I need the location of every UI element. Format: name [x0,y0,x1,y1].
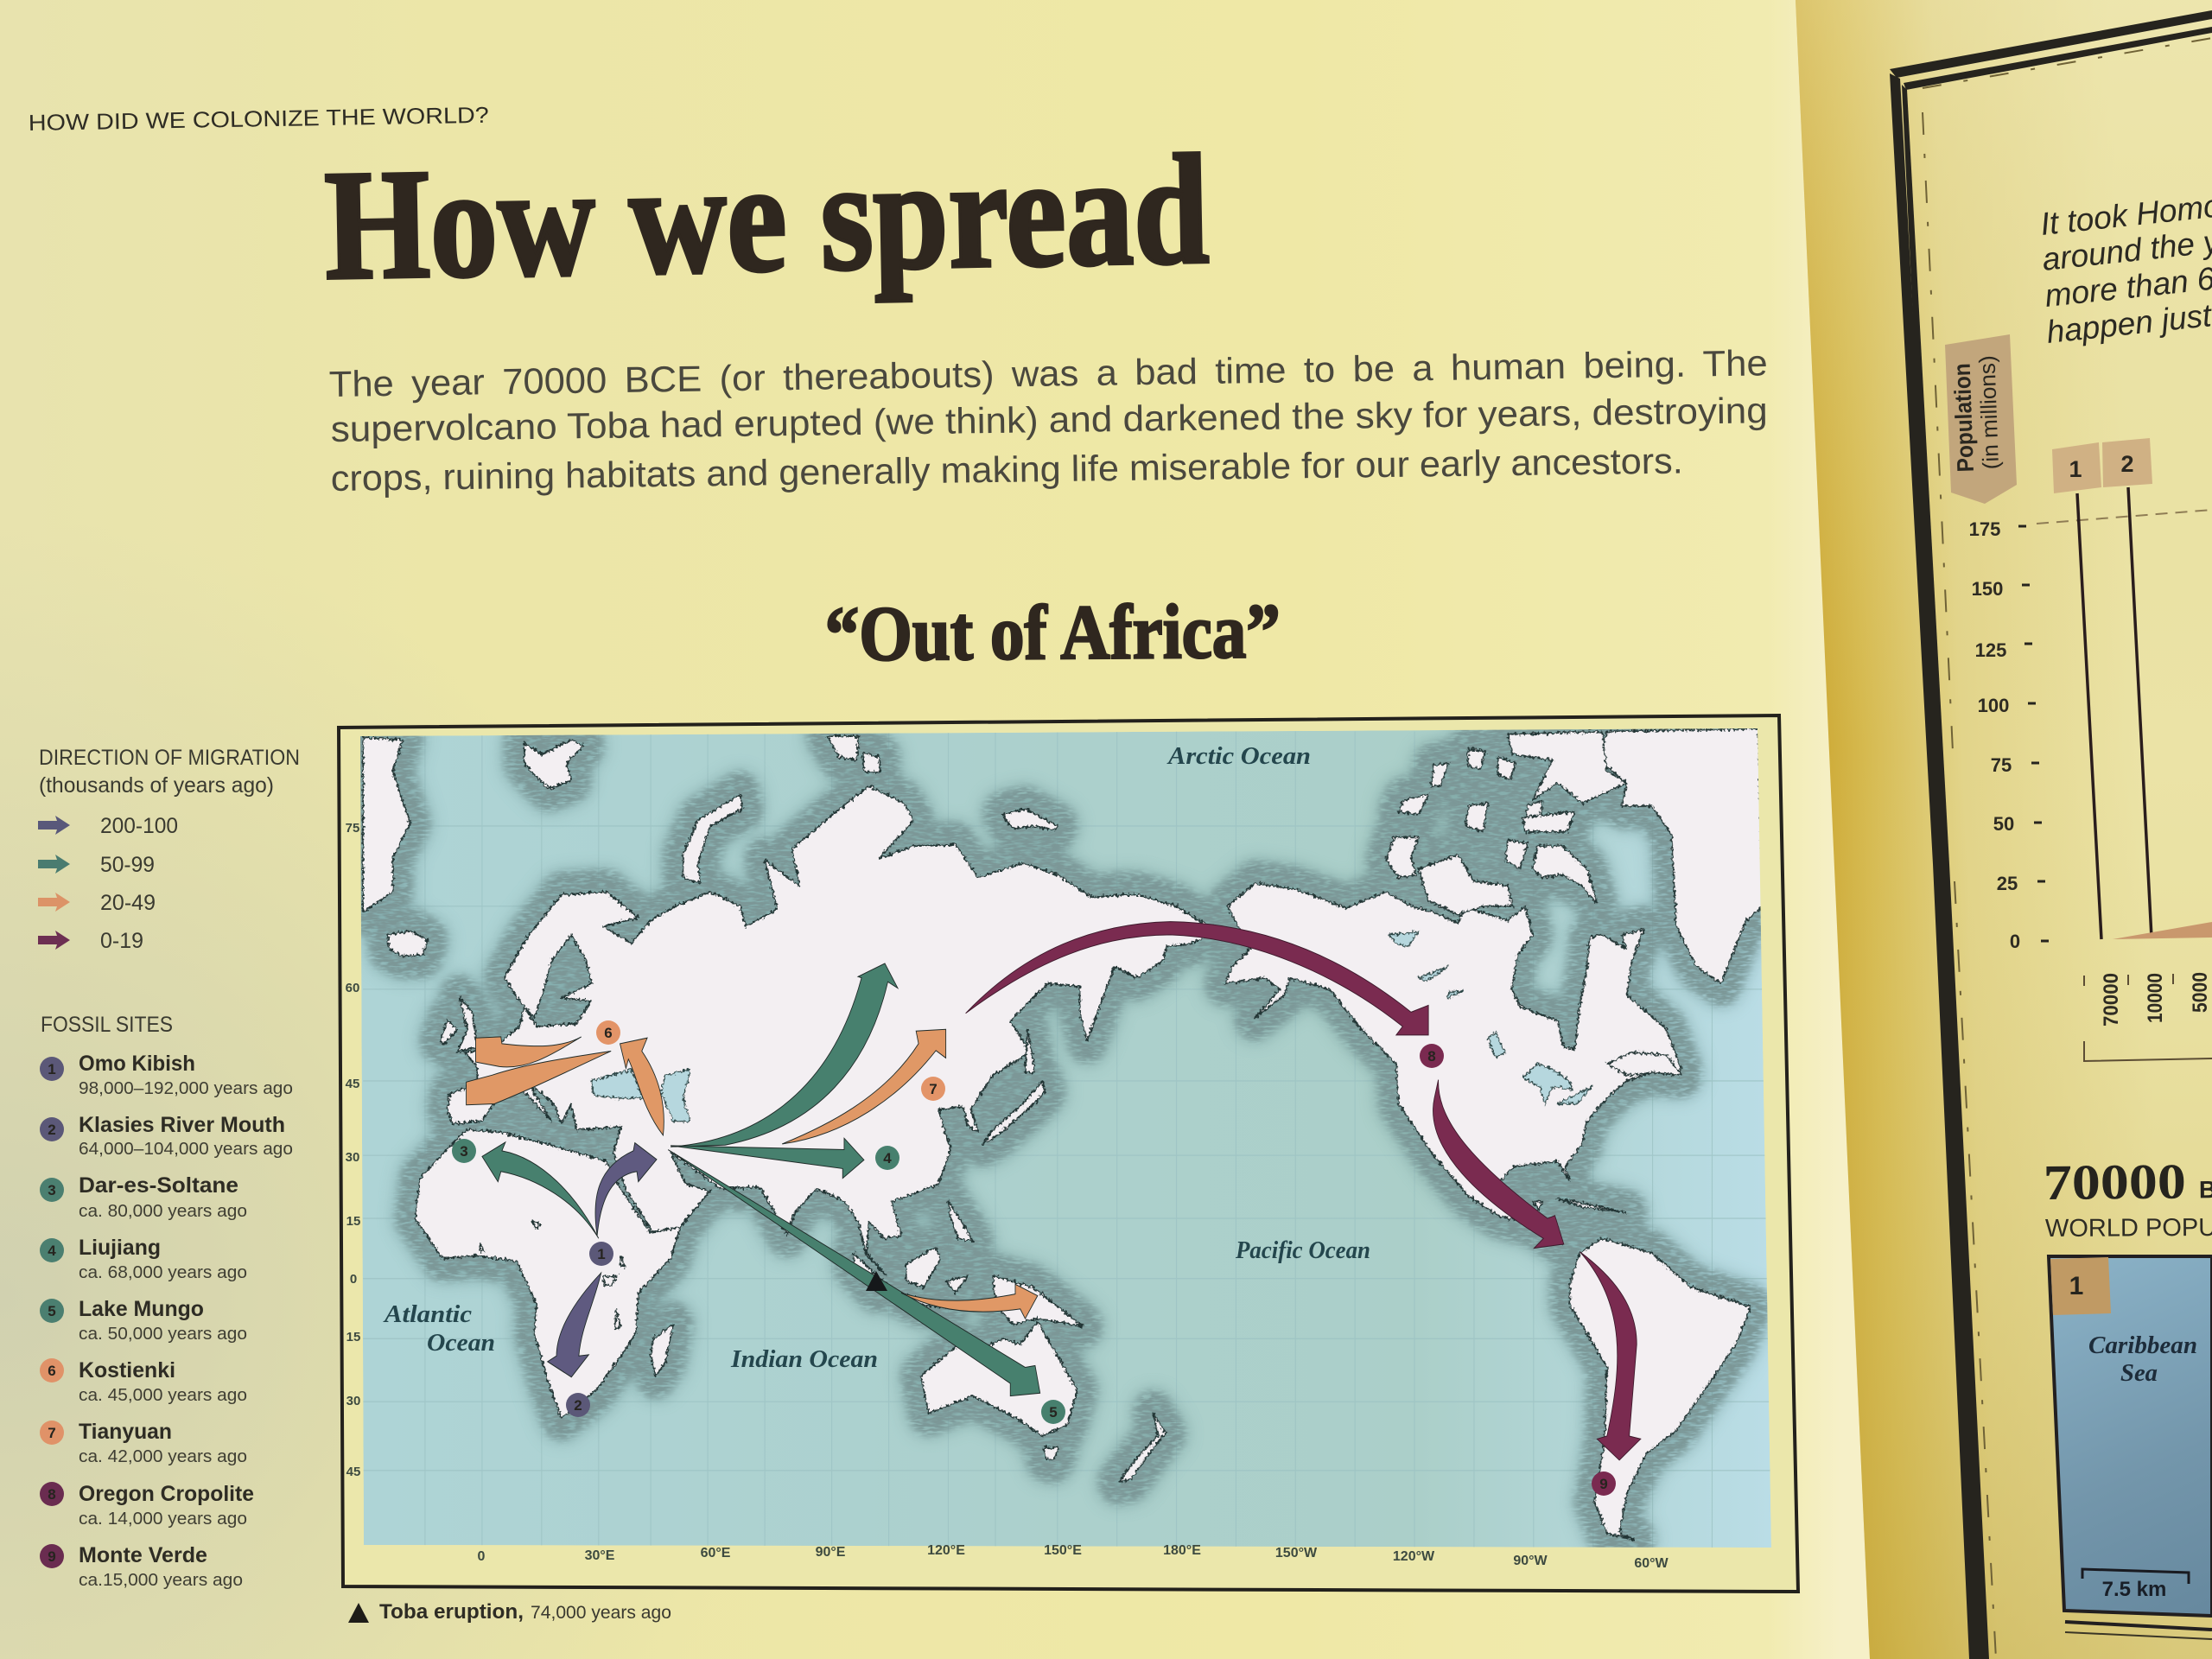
site 7 [40,1420,247,1466]
site 7: 7 [48,1425,56,1441]
timeline box 2: 2 [2120,451,2134,477]
year heading: 70000 [2044,1154,2186,1211]
Toba eruption note [348,1600,671,1624]
arrow: orange to Tianyuan [782,1029,946,1144]
longitude labels: 90°E [816,1545,846,1560]
latitude labels: 30 [346,1150,359,1165]
site markers on map: 8 [1427,1048,1436,1065]
y axis labels [1969,518,2049,952]
latitude labels: 60 [346,981,359,995]
site 3: ca. 80,000 years ago [79,1202,247,1221]
Caribbean Sea label [2088,1332,2197,1387]
arrow: green to Central Asia [671,963,898,1147]
legend arrow: 0-19 [38,929,143,953]
arrow: green to Liujiang [671,1138,864,1179]
site 8: ca. 14,000 years ago [79,1510,247,1529]
axis tag: Population [1949,363,1979,473]
map frame [339,715,1798,1592]
scale bar: 7.5 km [2102,1578,2166,1601]
legend arrow: 50-99: 50-99 [100,853,155,877]
intro paragraph: supervolcano Toba had erupted (we think) and darkened the sky for years, destroying [331,390,1768,449]
site 1: 98,000–192,000 years ago [79,1079,293,1098]
timeline box 1 [2052,442,2101,493]
site 4 [40,1236,247,1282]
box number tag [2050,1257,2111,1315]
longitude labels: 60°E [701,1546,731,1560]
legend arrow: 20-49: 20-49 [100,891,156,915]
arrow: to Kostienki [620,1038,664,1135]
y axis labels: 25 [1997,873,2018,894]
y axis labels: 75 [1991,754,2012,776]
latitude labels: 0 [350,1272,357,1287]
section label: HOW DID WE COLONIZE THE WORLD? [29,102,489,136]
legend arrow: 200-100 [38,814,178,838]
latitude labels: 15 [346,1330,360,1344]
site 2 [40,1113,293,1159]
site 1 [40,1052,293,1098]
longitude labels: 180°E [1163,1543,1201,1558]
latitude labels: 15 [346,1214,360,1229]
site 7: ca. 42,000 years ago [79,1447,247,1466]
legend: direction of migration [38,746,300,953]
site 9 [40,1543,243,1590]
Caribbean Sea label: Sea [2120,1360,2158,1387]
site 6 [40,1358,247,1405]
site 8: Oregon Cropolite [79,1482,254,1506]
longitude labels: 120°E [927,1543,965,1558]
x axis labels: 10000 [2144,973,2167,1023]
panel: world map [339,715,1816,1592]
site 9: ca.15,000 years ago [79,1571,243,1590]
ocean labels: Atlantic [383,1301,473,1328]
migration arrows [467,922,1641,1460]
map heading: “Out of Africa” [824,588,1281,677]
latitude labels: 30 [346,1394,360,1408]
site 9: Monte Verde [79,1543,207,1567]
latitude labels: 45 [346,1077,359,1091]
site markers on map [452,1020,1616,1496]
arrow: Africa to Europe west upper [475,1037,582,1067]
latitude labels: 75 [346,821,359,836]
arrow: purple to South Africa [548,1273,601,1377]
legend: direction of migration: (thousands of years ago) [39,773,274,798]
site markers on map: 7 [929,1081,938,1097]
icon: Toba eruption triangle on map [866,1271,887,1291]
site markers on map: 4 [883,1150,892,1166]
arrow: maroon to Monte Verde [1580,1252,1641,1460]
arrow: maroon to Central America [1433,1080,1564,1249]
site markers on map: 9 [1599,1476,1608,1492]
legend arrow: 50-99 [38,853,155,877]
ocean labels: Arctic Ocean [1166,743,1311,770]
site 2: Klasies River Mouth [79,1113,285,1137]
site 4: 4 [48,1243,56,1259]
site markers on map: 3 [460,1143,468,1160]
site 5: Lake Mungo [79,1297,204,1321]
intro paragraph: The year 70000 BCE (or thereabouts) was a bad time to be a human being. The [328,342,1768,404]
panel: sea box [2049,1256,2212,1639]
site markers on map: 2 [574,1397,582,1414]
Toba eruption note: Toba eruption, [379,1600,524,1624]
legend: fossil sites: FOSSIL SITES [41,1013,173,1037]
x axis labels: 5000 [2189,972,2212,1013]
area under curve [2113,922,2212,939]
longitude labels: 0 [478,1549,486,1564]
site 3 [40,1173,247,1221]
longitude labels: 60°W [1634,1556,1669,1571]
site 7: Tianyuan [79,1420,172,1444]
axis tag [1945,334,2017,504]
title: How we spread [323,123,1211,313]
Toba eruption note: 74,000 years ago [531,1603,671,1623]
site markers on map: 6 [604,1025,613,1041]
site 6: 6 [48,1363,56,1379]
site 8 [40,1482,254,1529]
site 3: 3 [48,1182,56,1198]
arrow: green to Dar-es-Soltane [482,1142,599,1238]
site 6: ca. 45,000 years ago [79,1386,247,1405]
longitude labels: 30°E [585,1548,615,1563]
intro paragraph [328,342,1768,499]
latitude labels: 45 [346,1465,360,1479]
right page intro text: more than 6 [2044,260,2212,314]
arrow: maroon across Bering [966,922,1428,1035]
site 4: ca. 68,000 years ago [79,1263,247,1282]
site 2: 64,000–104,000 years ago [79,1140,293,1159]
right page frame [1890,10,2212,1659]
arrow: Near East to Europe west lower [467,1051,611,1105]
right page intro text: happen just [2045,297,2212,350]
timeline box 2 [2102,438,2152,487]
y axis labels: 125 [1975,639,2006,661]
site 1: Omo Kibish [79,1052,195,1076]
box number tag: 1 [2069,1272,2083,1300]
legend arrow: 20-49 [38,891,156,915]
legend: fossil sites [40,1013,293,1590]
x axis labels [2084,972,2212,1061]
site 1: 1 [48,1061,56,1077]
legend arrow: 200-100: 200-100 [100,814,178,838]
y axis labels: 100 [1978,695,2009,716]
site markers on map: 1 [597,1246,606,1262]
site 5: 5 [48,1303,56,1319]
ocean labels [383,743,1370,1373]
longitude labels: 120°W [1393,1549,1435,1564]
axis tag: (in millions) [1974,355,2004,470]
x axis labels: 70000 [2100,973,2123,1027]
site 2: 2 [48,1122,56,1138]
intro paragraph: crops, ruining habitats and generally making life miserable for our early ancestors. [331,441,1683,499]
ocean labels: Indian Ocean [730,1346,878,1373]
ocean labels: Pacific Ocean [1235,1237,1370,1264]
map ocean and land [360,728,1816,1551]
y axis labels: 175 [1969,518,2000,540]
population chart [1945,334,2212,1061]
longitude labels: 150°W [1275,1546,1318,1560]
site 9: 9 [48,1548,56,1565]
y axis labels: 0 [2010,931,2020,952]
y axis labels: 150 [1972,578,2003,600]
scale bar [2082,1569,2189,1601]
legend arrow: 0-19: 0-19 [100,929,143,953]
right page intro text [2039,188,2212,350]
y axis labels: 50 [1993,813,2014,835]
timeline box 1: 1 [2069,456,2082,482]
site 6: Kostienki [79,1358,175,1382]
longitude labels: 90°W [1513,1554,1548,1568]
site 5: ca. 50,000 years ago [79,1325,247,1344]
longitude labels: 150°E [1044,1543,1082,1558]
site 3: Dar-es-Soltane [79,1173,238,1198]
latitude labels [346,821,360,1479]
legend: direction of migration: DIRECTION OF MIGRATION [39,746,300,770]
longitude labels [478,1543,1669,1571]
site 5 [40,1297,247,1344]
ocean labels: Ocean [427,1330,495,1357]
site markers on map: 5 [1049,1404,1058,1421]
Caribbean Sea label: Caribbean [2088,1332,2197,1359]
arrow: purple to Near East [595,1143,657,1236]
site 4: Liujiang [79,1236,161,1260]
arrow: green to Lake Mungo [668,1150,1040,1396]
site 8: 8 [48,1486,56,1503]
arrow: orange to New Guinea [901,1284,1038,1319]
